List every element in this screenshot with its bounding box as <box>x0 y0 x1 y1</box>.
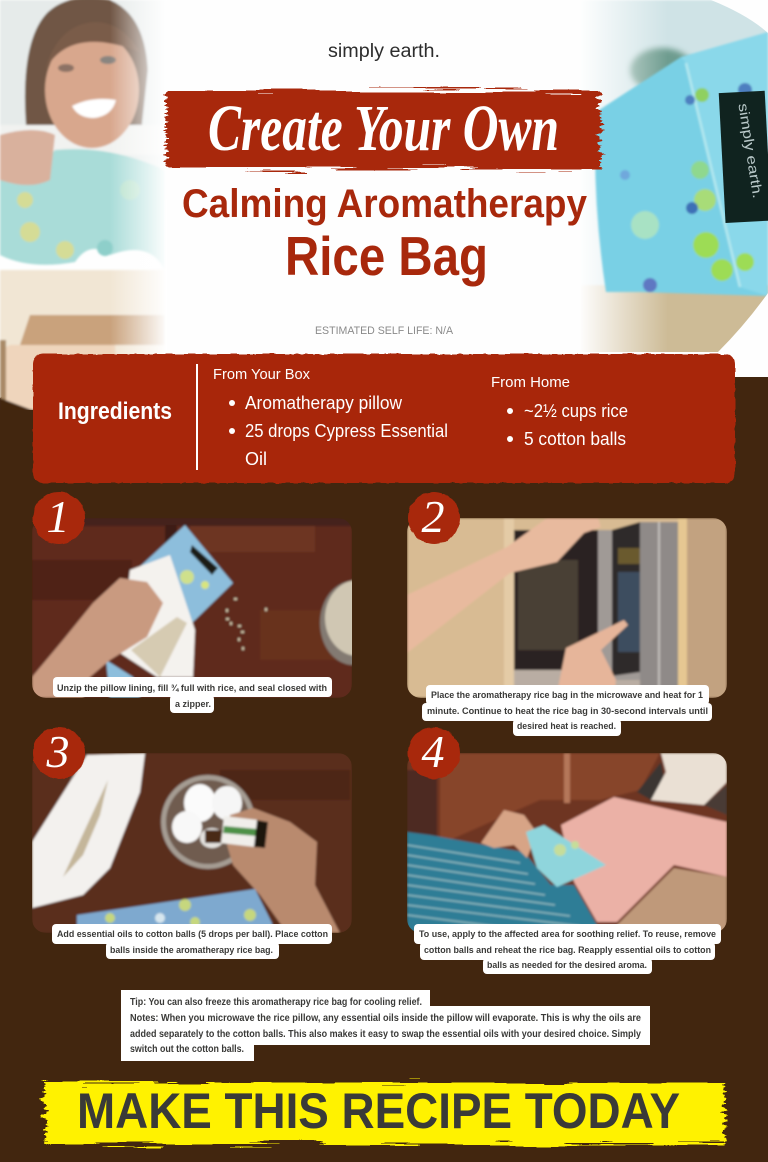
step 3 caption: balls inside the aromatherapy rice bag. <box>110 945 273 956</box>
step 2 number badge: 2 <box>422 491 444 542</box>
list: from home: From Home <box>491 374 570 391</box>
photo: woman holding rice bag <box>0 0 164 410</box>
icon: pillow brand label: simply earth. <box>735 102 766 199</box>
step 4 caption: cotton balls and reheat the rice bag. Reapply essential oils to cotton <box>424 945 711 956</box>
step 4 caption: To use, apply to the affected area for soothing relief. To reuse, remove <box>419 929 716 940</box>
tip and notes: Notes: When you microwave the rice pillow, any essential oils inside the pillow will evaporate. This is why the oils are <box>130 1013 641 1024</box>
tip and notes <box>121 990 650 1061</box>
step 2 number badge <box>408 491 460 544</box>
call to action banner <box>44 1083 725 1144</box>
step 3 caption: Add essential oils to cotton balls (5 drops per ball). Place cotton <box>57 929 328 940</box>
list: from your box: From Your Box <box>213 366 310 383</box>
title banner <box>166 91 600 169</box>
list: from home: ~2½ cups rice <box>524 401 628 421</box>
panel: ingredients <box>33 354 735 483</box>
step 3 number badge <box>33 726 85 779</box>
step 2 caption: desired heat is reached. <box>517 721 616 732</box>
list: from your box: Aromatherapy pillow <box>245 393 403 413</box>
tip and notes: switch out the cotton balls. <box>130 1044 244 1055</box>
panel background <box>33 354 735 483</box>
heading: Calming Aromatherapy: Calming Aromatherapy <box>182 182 588 226</box>
step 1 photo: filling pillow with rice <box>32 518 352 698</box>
yellow brush stroke <box>44 1083 725 1144</box>
list: from your box <box>213 366 448 469</box>
logo: simply earth. <box>328 41 440 62</box>
step 4 photo: applying rice bag <box>407 753 727 933</box>
step 3 number badge: 3 <box>46 726 70 777</box>
shelf life note: ESTIMATED SELF LIFE: N/A <box>315 325 454 337</box>
step 4 caption <box>414 924 721 974</box>
tip and notes: added separately to the cotton balls. This also makes it easy to swap the essential oils with your desired choice. Simply <box>130 1029 641 1040</box>
icon: pillow brand label <box>719 91 768 223</box>
heading: Rice Bag: Rice Bag <box>285 225 488 287</box>
step 2 photo: microwave <box>407 518 727 698</box>
step 4 caption: balls as needed for the desired aroma. <box>487 960 647 971</box>
step 2 caption: minute. Continue to heat the rice bag in 30-second intervals until <box>427 706 708 717</box>
step 2 caption <box>422 685 712 736</box>
step 1 caption: Unzip the pillow lining, fill ¾ full with rice, and seal closed with <box>57 683 327 694</box>
ingredients heading: Ingredients <box>58 398 172 425</box>
header white area <box>0 0 768 398</box>
step 3 photo: oil on cotton balls <box>32 753 352 933</box>
list: from your box: 25 drops Cypress Essential <box>245 421 448 441</box>
tip and notes: Tip: You can also freeze this aromatherapy rice bag for cooling relief. <box>130 997 422 1008</box>
step 1 number badge <box>33 491 85 544</box>
step 4 number badge <box>408 726 460 779</box>
button label: MAKE THIS RECIPE TODAY <box>77 1083 680 1139</box>
step 4 number badge: 4 <box>422 726 444 777</box>
step 1 number badge: 1 <box>46 491 70 542</box>
heading: Create Your Own: Create Your Own <box>208 92 559 165</box>
list: from home: 5 cotton balls <box>524 429 626 449</box>
list: from your box: Oil <box>245 449 267 469</box>
step 1 caption: a zipper. <box>175 699 211 710</box>
step 2 caption: Place the aromatherapy rice bag in the microwave and heat for 1 <box>431 690 704 701</box>
brush stroke <box>166 91 600 169</box>
step 1 caption <box>53 677 332 713</box>
list: from home <box>491 374 628 449</box>
step 3 caption <box>52 924 332 959</box>
photo: aromatherapy pillow close-up <box>578 0 768 360</box>
